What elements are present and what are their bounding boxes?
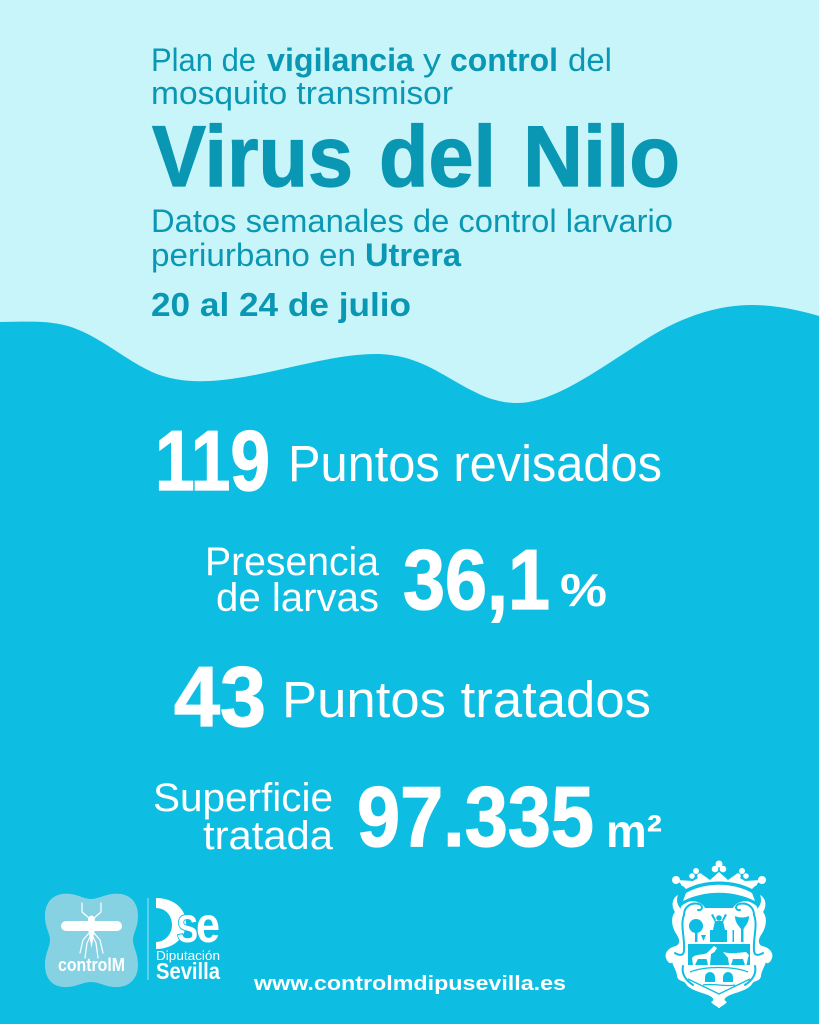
text: Diputación: Diputación	[156, 948, 220, 963]
title: del	[379, 109, 496, 205]
icon: coat of arms of Utrera	[666, 860, 772, 1008]
title: Nilo	[523, 109, 680, 205]
shield emblems: tree, castle, figure, cup	[689, 914, 749, 942]
crown	[672, 860, 766, 901]
wordmark: Se: S	[177, 908, 198, 951]
stat: superficie tratada: 97.335	[357, 770, 594, 865]
intro line 1: del	[568, 42, 612, 78]
icon: DSe crescent mark	[156, 898, 186, 949]
title	[152, 109, 680, 205]
subtitle line 2: periurbano en	[151, 237, 356, 273]
stat: puntos revisados: Puntos revisados	[288, 435, 662, 492]
shield: blue scroll lines	[675, 903, 763, 985]
intro line 1	[151, 42, 612, 78]
subtitle line 2	[151, 237, 461, 273]
intro line 1: y	[423, 42, 441, 78]
logo: controlM	[45, 894, 138, 987]
shield panel with horse and bull	[688, 944, 750, 965]
stat: puntos tratados: Puntos tratados	[282, 671, 651, 728]
wave panel	[0, 305, 819, 1024]
wordmark: Se: e	[196, 897, 220, 953]
stat: superficie tratada: m²	[606, 805, 662, 857]
shield: scrollwork frame	[666, 895, 772, 1008]
divider	[148, 898, 149, 980]
title: Virus	[152, 109, 353, 205]
stat: puntos tratados	[174, 650, 651, 745]
subtitle line 2: Utrera	[365, 237, 461, 273]
stat: presencia de larvas	[205, 533, 607, 628]
stat: presencia de larvas: de larvas	[216, 576, 379, 620]
intro line 1: Plan de	[151, 42, 256, 78]
stat: puntos tratados: 43	[174, 650, 266, 745]
wordmark: Se	[177, 897, 220, 953]
header text block	[151, 42, 680, 323]
shield bridge	[705, 972, 733, 982]
stat: presencia de larvas: 36,1	[403, 533, 550, 628]
stat: puntos revisados	[155, 414, 662, 509]
icon: mosquito	[61, 903, 122, 958]
intro line 1: vigilancia	[267, 42, 414, 78]
intro line 1: control	[450, 42, 558, 78]
stat: presencia de larvas: Presencia	[205, 540, 380, 584]
logo: Diputación Sevilla	[156, 897, 220, 984]
text: Sevilla: Sevilla	[156, 958, 220, 984]
intro line 2: mosquito transmisor	[151, 75, 453, 111]
website url: www.controlmdipusevilla.es	[253, 973, 566, 995]
stat: superficie tratada	[153, 770, 662, 865]
subtitle line 1: Datos semanales de control larvario	[151, 203, 673, 239]
stat: presencia de larvas: %	[560, 564, 607, 616]
stat: superficie tratada: tratada	[203, 814, 334, 858]
date: 20 al 24 de julio	[151, 286, 411, 323]
stat: superficie tratada: Superficie	[153, 776, 333, 820]
wordmark: controlM: controlM	[58, 955, 125, 975]
stat: puntos revisados: 119	[155, 414, 270, 509]
